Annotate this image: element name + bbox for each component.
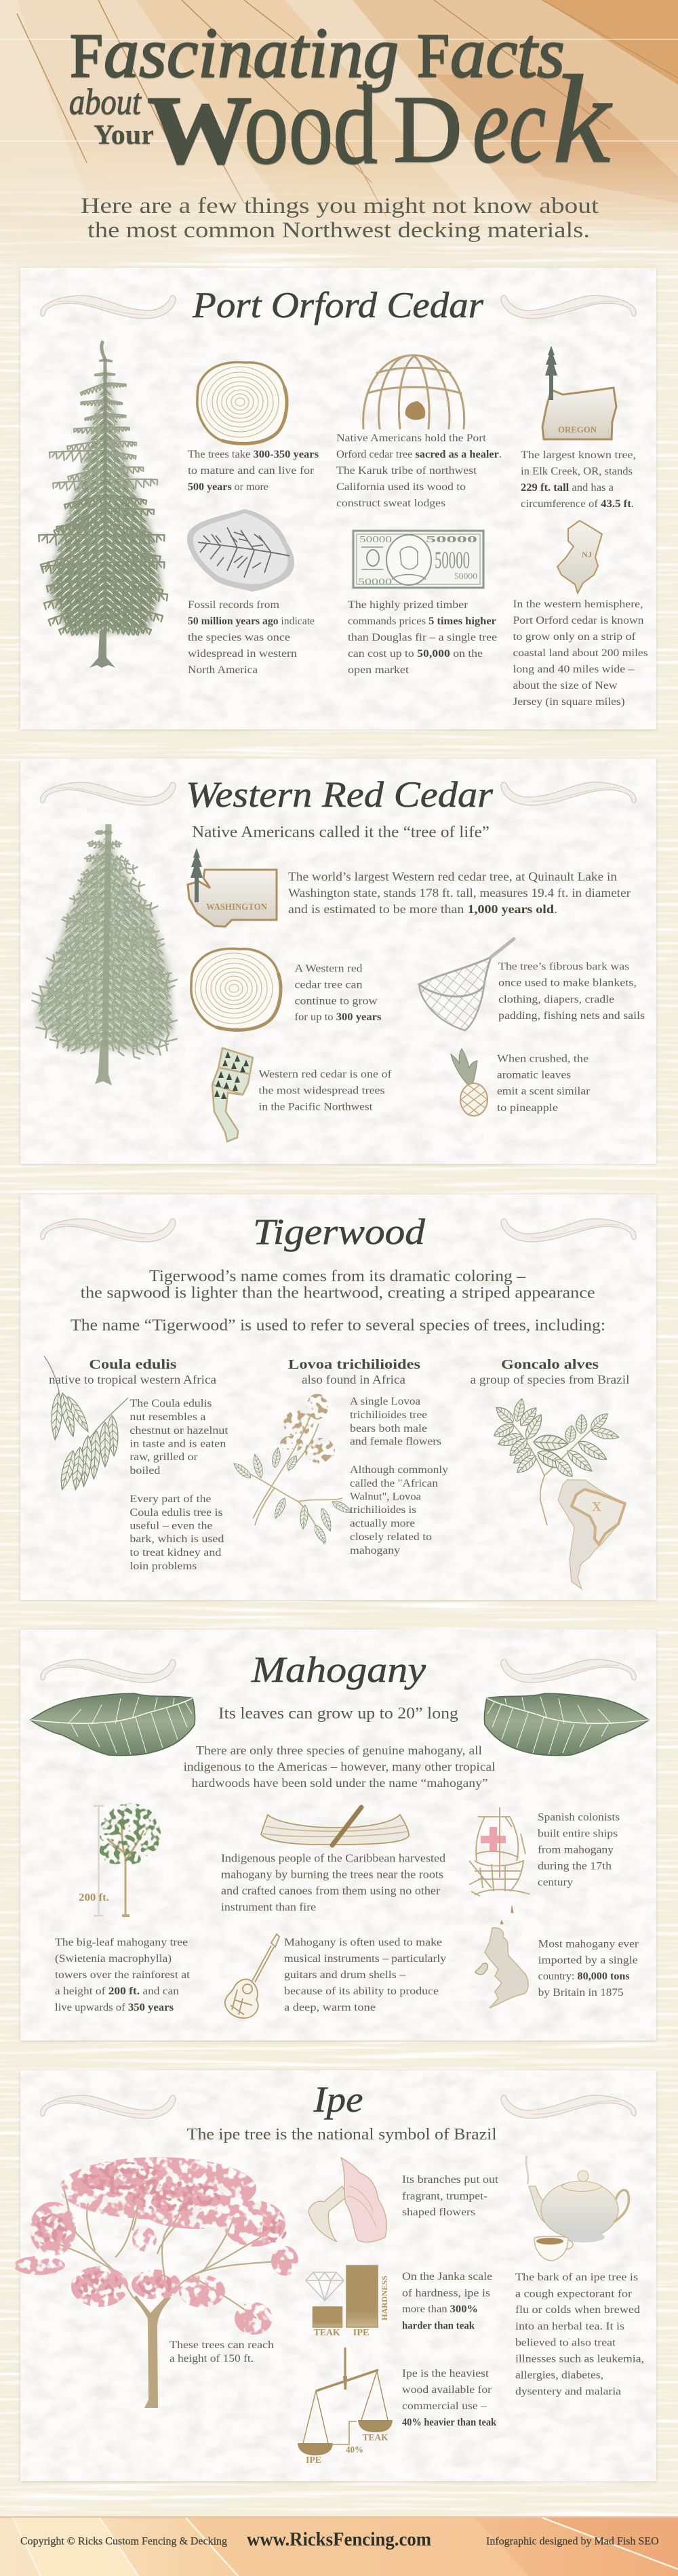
text: heaviest wood xyxy=(402,2368,496,2428)
text: prices: can cost up to 50,000 on the xyxy=(348,648,483,660)
text: ships: built entire ships xyxy=(538,1828,618,1840)
text: largest tree: 229 ft. tall and has a xyxy=(521,482,614,494)
icon: tree rings xyxy=(197,362,287,443)
intro text: There are only three species of genuine mahogany, all xyxy=(196,1744,482,1757)
text: widespread: the most widespread trees xyxy=(259,1085,385,1097)
text: Coula uses: bark, which is used xyxy=(129,1533,224,1545)
text: pineapple scent: When crushed, the xyxy=(497,1053,589,1064)
text: prices: open market xyxy=(348,664,410,676)
text: African walnut: closely related to xyxy=(350,1531,432,1543)
text: African walnut xyxy=(350,1464,448,1556)
text: canoes: mahogany by burning the trees near the roots xyxy=(221,1868,443,1881)
text: big-leaf mahogany: a height of 200 ft. and can xyxy=(55,1986,179,1997)
text: herbal tea: into an herbal tea. It is xyxy=(515,2321,624,2332)
illustration: Goncalo alves branch xyxy=(492,1397,620,1525)
panel: Tigerwood xyxy=(20,1194,656,1600)
text: pineapple scent xyxy=(497,1053,591,1114)
text: African walnut: Although commonly xyxy=(350,1464,448,1476)
icon: South America map xyxy=(558,1480,626,1589)
text: herbal tea: flu or colds when brewed xyxy=(515,2304,640,2316)
text: fossil records xyxy=(188,599,315,676)
intro text xyxy=(81,194,599,243)
heading: Mahogany: Mahogany xyxy=(251,1649,426,1690)
text: Coula uses: Coula edulis tree is xyxy=(129,1507,222,1518)
flourish right xyxy=(501,1659,636,1683)
text: flowers: shaped flowers xyxy=(402,2207,475,2218)
text: canoes xyxy=(221,1852,446,1914)
flourish right xyxy=(501,1219,636,1242)
icon: South America map: X xyxy=(592,1500,602,1514)
icon: banknote: 50000 xyxy=(358,576,392,586)
text: prices xyxy=(348,599,497,676)
text: fossil records: North America xyxy=(188,664,258,676)
text: fibrous bark: padding, fishing nets and sails xyxy=(498,1010,645,1022)
illustration: pink ipe tree xyxy=(14,2157,298,2408)
footer band xyxy=(0,2516,678,2576)
text: healer xyxy=(336,432,502,509)
text: Janka xyxy=(402,2271,492,2332)
icon: fossil xyxy=(187,509,294,592)
text: tree height xyxy=(170,2339,274,2364)
text: Lovoa flowers: trichilioides tree xyxy=(350,1409,427,1421)
panel background xyxy=(20,1194,656,1600)
text: herbal tea xyxy=(515,2272,644,2397)
illustration: guitar xyxy=(225,1934,279,2018)
bar: teak xyxy=(313,2307,342,2327)
illustration: mahogany tree with 200 ft scale: 200 ft. xyxy=(79,1892,109,1904)
text: Janka: harder than teak xyxy=(402,2320,475,2332)
text: Coula nut: in taste and is eaten xyxy=(129,1438,226,1450)
text: tree height: a height of 150 ft. xyxy=(170,2353,254,2364)
illustration: trumpet flower xyxy=(308,2158,386,2242)
intro text: Tigerwood’s name comes from its dramatic coloring – xyxy=(149,1268,526,1285)
axis label: hardness: HARDNESS xyxy=(380,2276,389,2320)
icon: New Jersey map: NJ xyxy=(582,550,592,559)
text: instruments: a deep, warm tone xyxy=(284,2002,376,2013)
panel background xyxy=(20,1630,656,2040)
credit: Infographic designed by Mad Fish SEO xyxy=(486,2535,659,2548)
text: Coula nut: chestnut or hazelnut xyxy=(129,1425,228,1436)
text: fossil records: widespread in western xyxy=(188,648,297,660)
title word: Deck: k xyxy=(553,50,612,189)
text: Britain imports: imported by a single xyxy=(538,1954,638,1966)
text: healer: The Karuk tribe of northwest xyxy=(336,465,477,477)
text: range: Jersey (in square miles) xyxy=(513,696,625,708)
text: Britain imports: Most mahogany ever xyxy=(538,1938,639,1950)
chart: hardness bars xyxy=(306,2266,389,2338)
text: widespread xyxy=(259,1068,392,1113)
illustration: Spanish ship xyxy=(469,1807,530,1896)
title word: Wood: ood xyxy=(244,63,378,187)
text: ships: Spanish colonists xyxy=(538,1812,620,1824)
icon: Washington map xyxy=(188,848,277,927)
title word: Deck: D xyxy=(393,75,462,182)
text: big-leaf mahogany: The big-leaf mahogany tree xyxy=(55,1937,188,1948)
illustration: teapot and cup xyxy=(526,2156,629,2261)
intro text xyxy=(183,1744,495,1790)
panel: Port Orford Cedar xyxy=(20,268,656,729)
text: range: about the size of New xyxy=(513,680,618,691)
text: Britain imports: country: 80,000 tons xyxy=(538,1971,630,1982)
text: range xyxy=(513,599,648,708)
text: Lovoa flowers: bears both male xyxy=(350,1423,427,1434)
text: pineapple scent: aromatic leaves xyxy=(497,1070,571,1081)
panel: Western Red Cedar xyxy=(20,759,656,1164)
text: Lovoa flowers: A single Lovoa xyxy=(350,1396,420,1407)
text: Britain imports xyxy=(538,1938,639,1998)
illustration: Lovoa branch xyxy=(231,1394,353,1545)
column heading: Goncalo alves: a group of species from Brazil xyxy=(471,1373,629,1386)
title word: Wood: W xyxy=(147,77,252,184)
label: teak: TEAK xyxy=(363,2433,388,2443)
flourish left xyxy=(41,782,176,805)
heading: Tigerwood: Tigerwood xyxy=(253,1211,426,1252)
icon: Oregon map: OREGON xyxy=(558,424,597,435)
text: grow for 300 years: cedar tree can xyxy=(294,979,362,991)
icon: sweat lodge frame xyxy=(363,355,464,428)
text: flowers xyxy=(402,2174,499,2218)
text: pineapple scent: emit a scent similar xyxy=(497,1086,591,1097)
column heading: Lovoa trichilioides: Lovoa trichilioides xyxy=(288,1357,420,1372)
label: ipe: IPE xyxy=(306,2455,321,2466)
text: herbal tea: illnesses such as leukemia, xyxy=(515,2354,644,2364)
text: grow for 300 years xyxy=(294,963,381,1023)
panel background xyxy=(20,759,656,1164)
illustration: canoe xyxy=(261,1807,409,1845)
icon: mahogany leaf left xyxy=(31,1693,195,1756)
flourish right xyxy=(501,2095,636,2118)
footer wood planks xyxy=(0,2516,678,2576)
title line: Fascinating Facts: F xyxy=(70,21,103,90)
column heading: Coula edulis: native to tropical western Africa xyxy=(49,1373,216,1386)
intro text: The name “Tigerwood” is used to refer to several species of trees, including: xyxy=(71,1316,605,1334)
icon: banknote xyxy=(353,531,483,588)
text: heaviest wood: wood available for xyxy=(402,2384,492,2396)
text: Coula nut xyxy=(129,1398,228,1476)
title word: about: about xyxy=(69,81,142,122)
text: range: to grow only on a strip of xyxy=(513,631,636,643)
icon: fishing net xyxy=(414,939,514,1034)
title line: Fascinating Facts: acts xyxy=(450,13,565,92)
text: fibrous bark: clothing, diapers, cradle xyxy=(498,994,614,1005)
text: maturity: 500 years or more xyxy=(188,481,268,493)
subheading: Native Americans called it the “tree of life” xyxy=(192,824,490,841)
text: Coula nut: nut resembles a xyxy=(129,1411,205,1423)
text: instruments: musical instruments – particularly xyxy=(284,1953,446,1965)
flourish left xyxy=(41,1659,176,1683)
text: Lovoa flowers xyxy=(350,1396,441,1447)
text: fossil records: the species was once xyxy=(188,632,290,643)
text: range: long and 40 miles wide – xyxy=(513,664,635,675)
text: pineapple scent: to pineapple xyxy=(497,1102,558,1114)
text: widespread: in the Pacific Northwest xyxy=(259,1101,373,1113)
text: healer: Native Americans hold the Port xyxy=(336,432,487,444)
text: Britain imports: by Britain in 1875 xyxy=(538,1987,624,1998)
text: instruments xyxy=(284,1937,446,2013)
text: range: coastal land about 200 miles xyxy=(513,647,648,659)
text: African walnut: mahogany xyxy=(350,1545,400,1556)
text: fibrous bark: once used to make blankets, xyxy=(498,978,637,988)
text: big-leaf mahogany: towers over the rainforest at xyxy=(55,1969,191,1981)
text: instruments: Mahogany is often used to make xyxy=(284,1937,442,1948)
title line: Fascinating Facts: ascinating xyxy=(104,13,399,92)
text: fibrous bark: The tree’s fibrous bark was xyxy=(498,961,629,972)
icon: banknote: 50000 xyxy=(454,571,477,581)
intro text: hardwoods have been sold under the name “mahogany” xyxy=(192,1776,488,1790)
text: herbal tea: a cough expectorant for xyxy=(515,2289,633,2299)
text: Janka: of hardness, ipe is xyxy=(402,2287,490,2299)
icon: banknote: 50000 xyxy=(426,535,477,545)
text: range: In the western hemisphere, xyxy=(513,599,643,610)
intro text: Here are a few things you might not know about xyxy=(81,194,599,218)
panel background xyxy=(20,2070,656,2481)
text: largest western red cedar: The world’s largest Western red cedar tree, at Quinault Lake in xyxy=(288,870,617,883)
text: African walnut: called the "African xyxy=(350,1478,438,1489)
text: African walnut: trichilioides is xyxy=(350,1504,416,1516)
illustration: Coula edulis leaves xyxy=(44,1356,128,1491)
text: largest tree: The largest known tree, xyxy=(521,449,636,461)
text: Coula uses: to treat kidney and xyxy=(129,1547,221,1558)
text: ships: century xyxy=(538,1876,573,1889)
copyright: Copyright © Ricks Custom Fencing & Decking xyxy=(20,2535,227,2548)
label: 40%: 40% xyxy=(346,2445,363,2455)
column heading: Lovoa trichilioides: also found in Africa xyxy=(302,1373,405,1386)
text: largest western red cedar xyxy=(288,870,631,916)
text: big-leaf mahogany xyxy=(55,1937,191,2013)
text: largest western red cedar: Washington state, stands 178 ft. tall, measures 19.4 ft. in diameter xyxy=(288,886,631,900)
icon: tree rings xyxy=(191,948,281,1030)
text: flowers: fragrant, trumpet- xyxy=(402,2191,487,2202)
text: widespread: Western red cedar is one of xyxy=(259,1068,392,1081)
text: flowers: Its branches put out xyxy=(402,2174,499,2186)
text: fibrous bark xyxy=(498,961,645,1022)
intro text: indigenous to the Americas – however, many other tropical xyxy=(183,1760,495,1773)
icon: Pacific Northwest map xyxy=(212,1048,253,1142)
text: Lovoa flowers: and female flowers xyxy=(350,1436,441,1447)
text: largest western red cedar: and is estimated to be more than 1,000 years old . xyxy=(288,902,557,916)
subheading: The ipe tree is the national symbol of Brazil xyxy=(187,2126,497,2144)
column heading: Coula edulis: Coula edulis xyxy=(89,1357,177,1372)
intro text: the sapwood is lighter than the heartwood, creating a striped appearance xyxy=(81,1285,595,1302)
text: prices: The highly prized timber xyxy=(348,599,468,611)
icon: Washington map: WASHINGTON xyxy=(206,902,267,912)
text: grow for 300 years: for up to 300 years xyxy=(294,1011,381,1023)
text: grow for 300 years: continue to grow xyxy=(294,995,378,1007)
icon: New Jersey map xyxy=(557,521,602,593)
label: teak: TEAK xyxy=(314,2328,340,2338)
text: maturity xyxy=(188,449,319,493)
subheading: Its leaves can grow up to 20” long xyxy=(218,1705,458,1723)
panel background xyxy=(20,268,656,729)
heading: Ipe: Ipe xyxy=(313,2079,363,2120)
title xyxy=(69,13,612,189)
icon: banknote: 50000 xyxy=(359,535,392,545)
website: www.RicksFencing.com xyxy=(247,2529,431,2550)
column heading: Goncalo alves: Goncalo alves xyxy=(501,1357,599,1372)
text: big-leaf mahogany: (Swietenia macrophylla) xyxy=(55,1953,172,1965)
text: heaviest wood: Ipe is the heaviest xyxy=(402,2368,490,2379)
icon: banknote: 50000 xyxy=(435,546,470,573)
text: canoes: instrument than fire xyxy=(221,1901,316,1914)
text: Coula uses: useful – even the xyxy=(129,1520,212,1532)
text: ships xyxy=(538,1812,620,1889)
text: herbal tea: believed to also treat xyxy=(515,2337,616,2349)
title word: Your: Your xyxy=(94,119,154,150)
text: big-leaf mahogany: live upwards of 350 years xyxy=(55,2002,174,2013)
text: healer: Orford cedar tree sacred as a healer. xyxy=(336,449,502,460)
text: healer: construct sweat lodges xyxy=(336,498,445,509)
text: Coula nut: raw, grilled or xyxy=(129,1451,198,1463)
illustration: mahogany tree with 200 ft scale xyxy=(79,1803,161,1916)
text: instruments: because of its ability to produce xyxy=(284,1986,439,1997)
illustration: balance scale xyxy=(298,2348,393,2466)
title line: Fascinating Facts: F xyxy=(417,21,450,90)
text: Coula uses: loin problems xyxy=(129,1561,197,1572)
bar: ipe xyxy=(346,2266,378,2327)
illustration: Western red cedar tree xyxy=(31,824,178,1085)
icon: Britain map xyxy=(475,1906,528,2008)
text: ships: during the 17th xyxy=(538,1860,612,1872)
text: healer: California used its wood to xyxy=(336,481,466,493)
heading: Western Red Cedar: Western Red Cedar xyxy=(186,774,494,815)
text: Janka: more than 300% xyxy=(402,2303,478,2315)
flourish left xyxy=(41,2095,176,2118)
text: Coula uses: Every part of the xyxy=(129,1493,211,1505)
panel: Mahogany xyxy=(20,1630,656,2040)
icon: Oregon map xyxy=(542,346,616,439)
title word: Deck: ec xyxy=(473,62,546,186)
text: African walnut: actually more xyxy=(350,1518,415,1529)
text: tree height: These trees can reach xyxy=(170,2339,274,2351)
text: canoes: and crafted canoes from them using no other xyxy=(221,1885,440,1897)
icon: pineapple xyxy=(451,1049,487,1116)
text: heaviest wood: 40% heavier than teak xyxy=(402,2417,496,2428)
text: largest tree: in Elk Creek, OR, stands xyxy=(521,466,633,477)
text: herbal tea: The bark of an ipe tree is xyxy=(515,2272,638,2283)
label: ipe: IPE xyxy=(353,2328,370,2338)
text: Coula nut: The Coula edulis xyxy=(129,1398,212,1409)
text: canoes: Indigenous people of the Caribbean harvested xyxy=(221,1852,446,1865)
illustration: Port Orford cedar tree xyxy=(38,340,168,668)
text: ships: from mahogany xyxy=(538,1844,614,1856)
text: heaviest wood: commercial use – xyxy=(402,2400,487,2412)
flourish right xyxy=(501,782,636,805)
panel: Ipe xyxy=(14,2070,656,2481)
text: herbal tea: dysentery and malaria xyxy=(515,2386,621,2397)
text: range: Port Orford cedar is known xyxy=(513,615,644,626)
text: fossil records: 50 million years ago indicate xyxy=(188,616,315,627)
flourish left xyxy=(41,1219,176,1242)
text: prices: than Douglas fir – a single tree xyxy=(348,632,497,643)
intro text: the most common Northwest decking materials. xyxy=(87,218,590,243)
icon: mahogany leaf right xyxy=(484,1693,649,1756)
text: largest tree xyxy=(521,449,636,510)
heading: Port Orford Cedar: Port Orford Cedar xyxy=(192,285,484,325)
text: Janka: On the Janka scale xyxy=(402,2271,492,2282)
text: African walnut: Walnut", Lovoa xyxy=(350,1491,421,1503)
text: Coula uses xyxy=(129,1493,224,1572)
intro text xyxy=(71,1268,605,1334)
text: largest tree: circumference of 43.5 ft. xyxy=(521,498,634,510)
text: fossil records: Fossil records from xyxy=(188,599,280,611)
text: grow for 300 years: A Western red xyxy=(294,963,362,975)
column heading: Lovoa trichilioides xyxy=(288,1357,420,1386)
flourish left xyxy=(41,296,176,319)
flourish right xyxy=(501,296,636,319)
icon: diamond xyxy=(306,2272,344,2301)
column heading: Goncalo alves xyxy=(471,1357,629,1386)
text: herbal tea: allergies, diabetes, xyxy=(515,2370,603,2381)
text: Coula nut: boiled xyxy=(129,1465,160,1476)
text: maturity: to mature and can live for xyxy=(188,465,315,477)
text: prices: commands prices 5 times higher xyxy=(348,616,496,627)
text: instruments: guitars and drum shells – xyxy=(284,1969,406,1981)
text: maturity: The trees take 300-350 years xyxy=(188,449,319,460)
header wood planks xyxy=(0,0,678,271)
column heading: Coula edulis xyxy=(49,1357,216,1386)
